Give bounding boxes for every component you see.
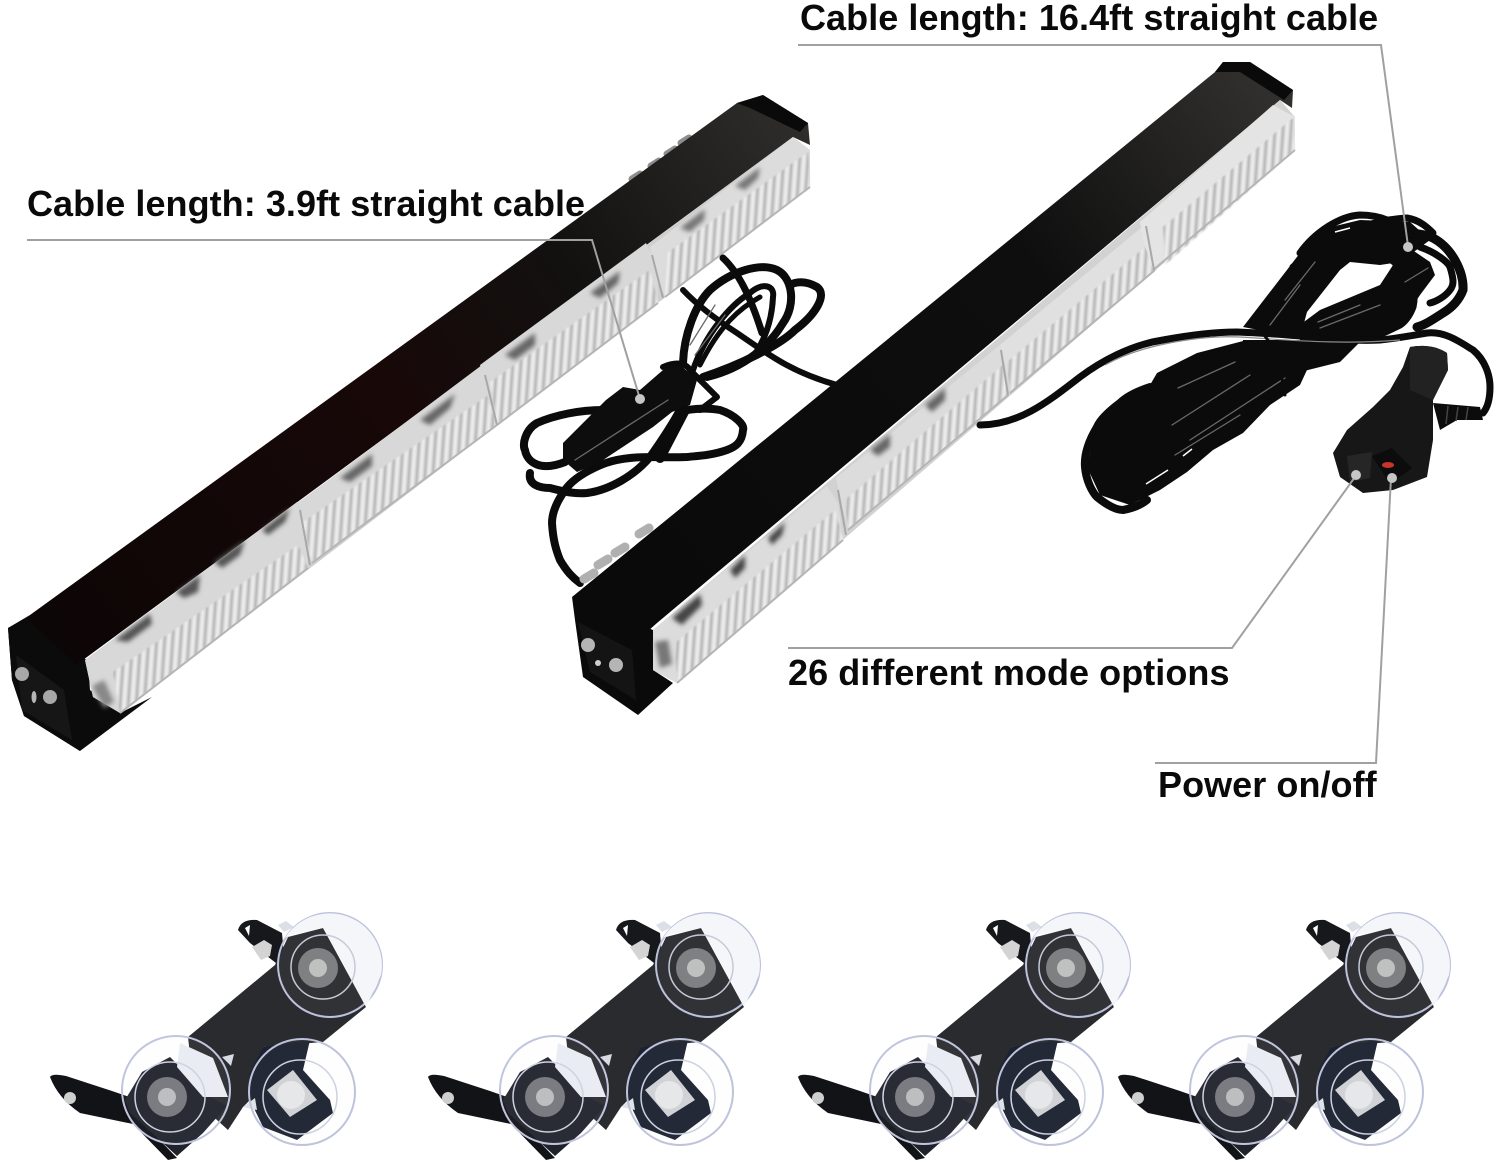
left bar lens module 1 <box>85 502 308 713</box>
left bar lens backing <box>85 137 810 713</box>
mode button <box>1347 452 1372 482</box>
right bar lens module 1 <box>653 486 843 683</box>
cable connector <box>563 362 697 472</box>
right bar black housing <box>572 62 1293 640</box>
left bar lens module 4 <box>650 137 810 297</box>
left bar mounting bracket <box>8 628 152 751</box>
suction cup mount 2 <box>428 913 760 1160</box>
light bar: left <box>8 95 810 751</box>
left bar lens module 3 <box>480 243 658 425</box>
left bar end cap <box>8 618 80 751</box>
left bar lens module 2 <box>298 365 497 563</box>
upper loops <box>1300 215 1387 253</box>
label: left cable length: Cable length: 3.9ft straight cable <box>27 183 585 224</box>
cable from bar to plug <box>980 332 1490 425</box>
right bar lens module 4 <box>1140 105 1295 270</box>
white slivers between strands <box>1146 228 1350 484</box>
right coiled cable bundle <box>980 215 1490 510</box>
strain relief <box>1433 403 1483 430</box>
right bar lens module 2 <box>836 345 1008 530</box>
right bar bolts <box>584 528 649 579</box>
lower lobe <box>1087 340 1313 505</box>
lower loops <box>1085 387 1150 510</box>
leader lines <box>27 45 1413 763</box>
car plug with switches <box>1333 346 1483 493</box>
left bar rear bolts <box>632 138 689 179</box>
right bar mounting bracket <box>572 597 673 715</box>
label: mode options: 26 different mode options <box>788 652 1230 693</box>
suction cup mount 4 <box>1118 913 1450 1160</box>
right bar lens module 3 <box>1000 222 1155 393</box>
light bar: right <box>572 62 1295 715</box>
upper right strands <box>1297 245 1435 340</box>
suction cup mount 1 <box>50 913 382 1160</box>
left coiled cable <box>524 258 837 583</box>
upper left strands <box>1243 220 1430 338</box>
zip tie around bundle <box>1262 333 1285 395</box>
label: power: Power on/off <box>1158 764 1378 805</box>
power switch with red LED <box>1372 448 1412 484</box>
right bar lens backing <box>653 100 1295 683</box>
left bar black housing <box>8 95 810 668</box>
glints on cable bundle <box>1172 262 1428 455</box>
zip tie <box>663 364 717 410</box>
suction cup mount 3 <box>798 913 1130 1160</box>
left bar far cap <box>737 95 808 132</box>
